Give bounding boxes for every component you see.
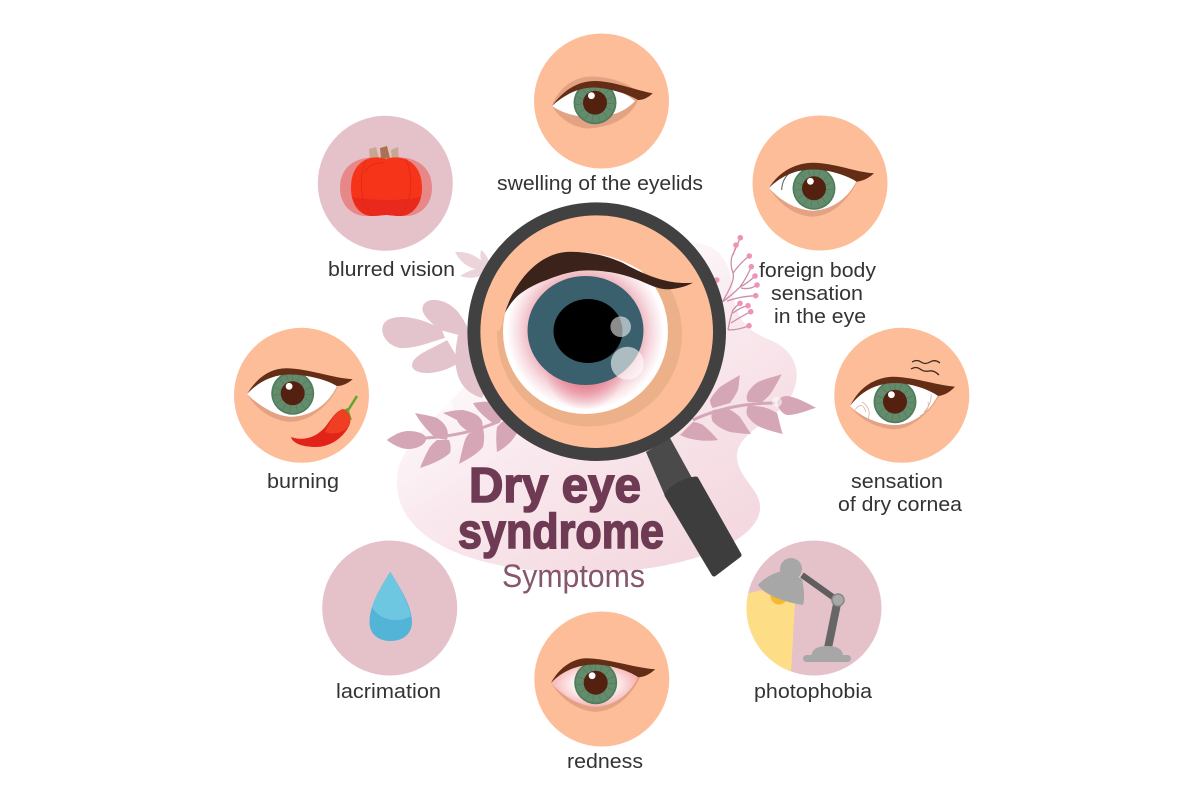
panel: photophobia [746,540,882,702]
twig buds [714,235,760,329]
panel: redness [534,612,669,773]
title: syndrome [458,505,664,559]
background blob [397,242,797,573]
right leaf branch [680,374,816,441]
title [458,459,664,594]
panel: lacrimation [322,540,457,703]
label: foreign body [759,260,876,282]
label [838,471,963,516]
icon: tear drop [370,572,412,641]
left leaf branch [387,401,517,468]
icon: red eye [551,658,655,712]
label: lacrimation [336,681,441,703]
panel: swelling of the eyelids [497,34,703,195]
handle neck [646,438,692,496]
label: photophobia [754,681,873,703]
icon: lamp [746,558,851,672]
icon: wavy lines [911,360,940,375]
label [759,260,876,328]
label: sensation [851,471,943,493]
panel: burning [234,328,369,493]
pink twig [714,235,760,330]
small top leaves [455,250,492,278]
icon: swollen eye [552,76,653,128]
panel: sensation of dry cornea [834,328,969,516]
large eye [497,252,693,426]
label: redness [567,751,643,773]
label: in the eye [774,306,866,328]
lens ring [474,209,720,454]
handle grip [667,479,739,574]
label: burning [267,471,339,493]
icon: eye with eyelash [769,163,874,217]
panel: blurred vision [318,116,455,281]
flower leaves [382,300,510,398]
icon: eye with chili [247,368,357,447]
title: Dry eye [469,459,641,513]
panel: foreign body sensation [752,116,888,328]
lens skin [479,214,715,450]
label: swelling of the eyelids [497,173,703,195]
label: sensation [771,283,863,305]
label: blurred vision [328,259,455,281]
icon: blurred tomato [340,146,432,216]
magnifying glass [470,205,739,574]
label: of dry cornea [838,494,963,516]
icon: dry eye [850,360,955,429]
title: Symptoms [502,558,645,594]
